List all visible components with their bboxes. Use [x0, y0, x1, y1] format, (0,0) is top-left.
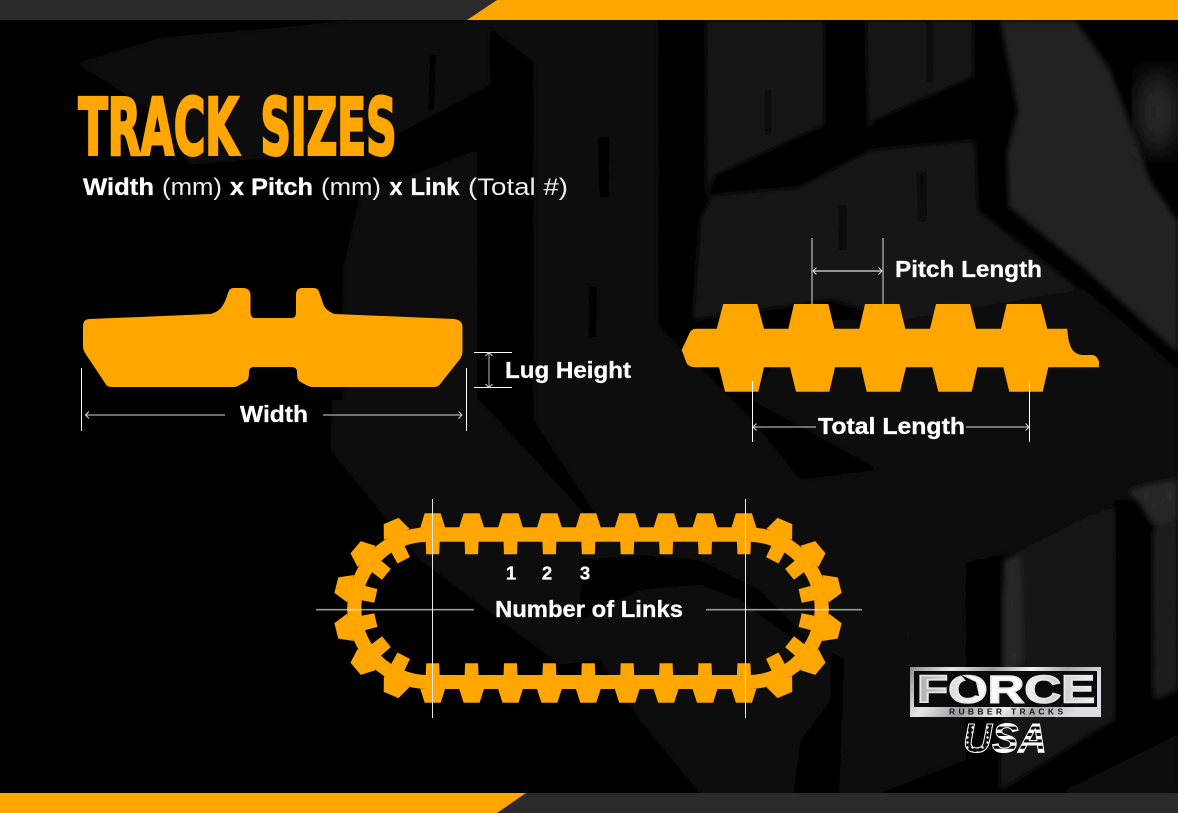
subtitle: size formula: x [390, 174, 403, 201]
side profile silhouette [682, 304, 1099, 392]
logo tagline: RUBBER TRACKS [949, 706, 1063, 716]
subtitle: size formula: Pitch [251, 174, 313, 201]
width dimension [82, 368, 466, 431]
title: SIZES [260, 84, 396, 174]
diagram: full track loop with number of links [316, 499, 862, 718]
pitch length dimension: Pitch Length [895, 256, 1042, 282]
diagram: track side profile with pitch and total length [682, 238, 1099, 442]
subtitle: size formula: (mm) [321, 174, 381, 201]
total length dimension: Total Length [818, 413, 965, 439]
title: TRACK [78, 84, 240, 174]
bottom bar [0, 793, 1178, 813]
pitch length dimension [812, 238, 1042, 304]
subtitle: size formula: (mm) [162, 174, 222, 201]
track cross-section silhouette [83, 288, 462, 387]
track loop belt and lugs [333, 513, 843, 703]
link counters: 2 [542, 562, 552, 584]
crosshair guide lines [316, 499, 862, 718]
logo wordmark: FORCE [917, 668, 1095, 712]
tread slots [428, 20, 1178, 793]
subtitle: size formula: (Total #) [468, 174, 568, 201]
logo USA flag lettering [963, 715, 1047, 761]
top bar [0, 0, 1178, 20]
link counters: 1 [506, 562, 516, 584]
total length dimension [752, 381, 1030, 442]
logo USA flag lettering: SA [992, 715, 1047, 761]
logo plate [910, 667, 1101, 717]
diagram: track cross-section with width and lug height [82, 288, 631, 431]
subtitle: size formula: x [230, 174, 245, 201]
width dimension: Width [240, 401, 308, 427]
subtitle: size formula [83, 174, 568, 201]
link counters [506, 562, 590, 584]
lug height dimension [474, 352, 631, 388]
logo: Force Rubber Tracks USA [910, 667, 1101, 761]
logo USA flag lettering: U [963, 715, 993, 761]
lug height dimension: Lug Height [505, 357, 631, 383]
link counters: 3 [580, 562, 590, 584]
logo bucket icon [961, 675, 979, 696]
number of links label: Number of Links [495, 596, 683, 622]
subtitle: size formula: Width [83, 174, 154, 201]
subtitle: size formula: Link [410, 174, 460, 201]
